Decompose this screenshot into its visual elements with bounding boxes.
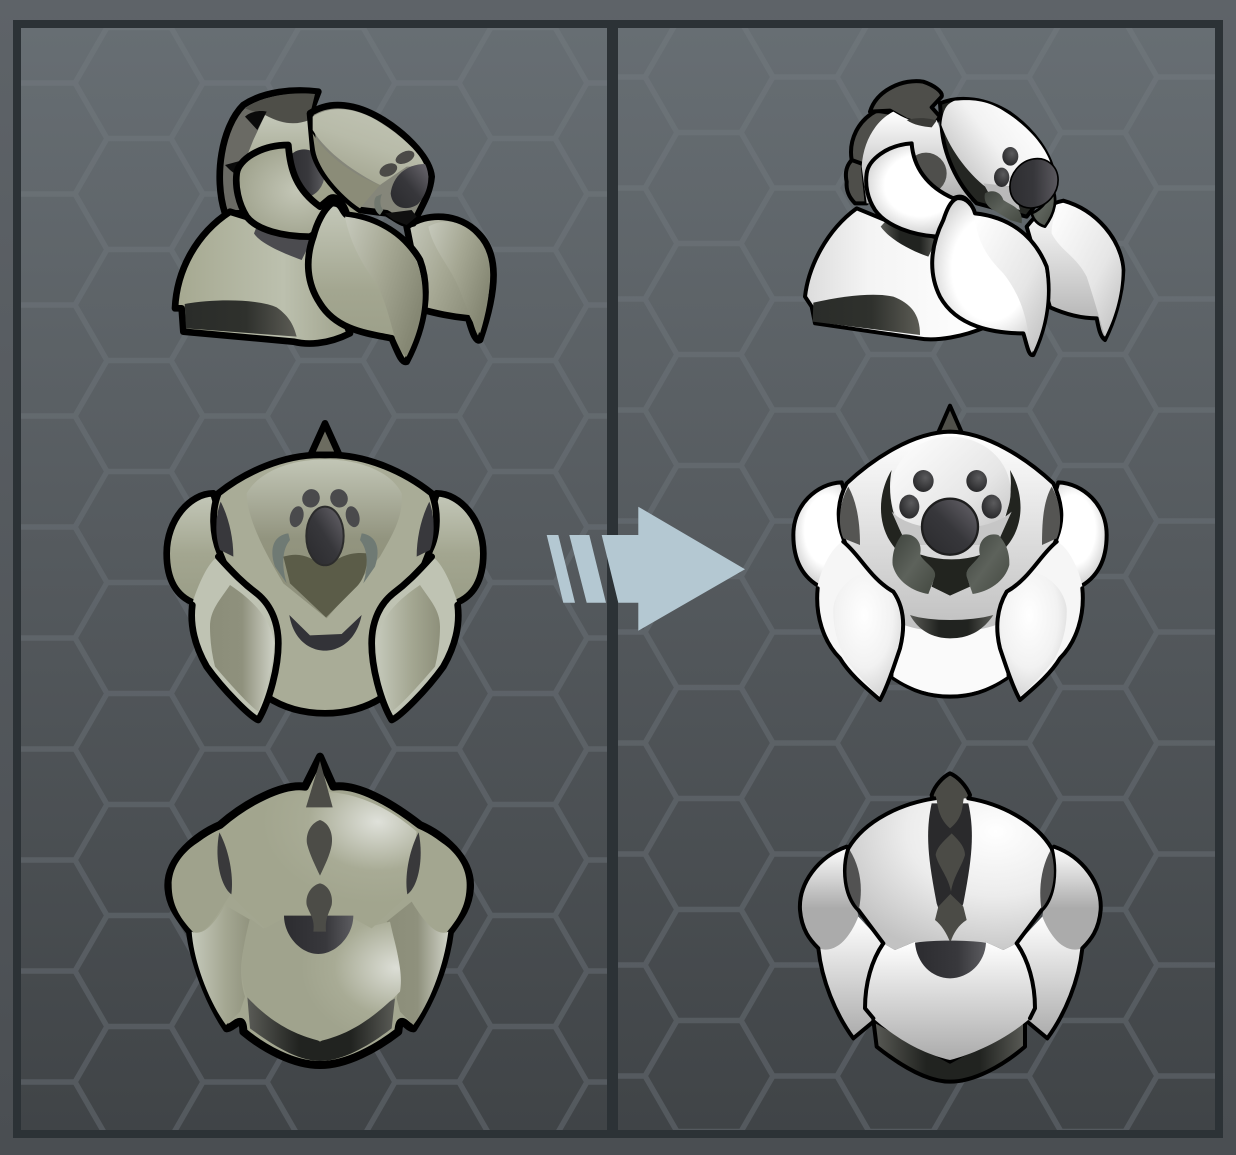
main eye <box>306 507 344 565</box>
mandible <box>374 194 383 215</box>
mandibles <box>985 191 1022 223</box>
side panels <box>216 502 434 557</box>
rear shoulders <box>167 493 483 603</box>
left shoulder <box>172 832 230 933</box>
shoulder socket <box>283 149 325 197</box>
face plate <box>247 459 402 618</box>
head capsule <box>940 99 1068 227</box>
dark head crescents <box>881 470 1021 550</box>
head globe <box>891 437 1011 547</box>
small eyes <box>899 470 1002 519</box>
creature: redesigned front view <box>793 406 1107 700</box>
shoulder pod <box>236 145 347 237</box>
abdomen band <box>873 1020 1025 1082</box>
abdomen outline <box>865 943 1035 1018</box>
right claw <box>997 542 1084 700</box>
abdomen <box>865 942 1035 1060</box>
front claw <box>932 198 1049 355</box>
head capsule <box>310 105 432 225</box>
tail semicircle <box>915 941 986 978</box>
right shoulder <box>1042 847 1101 950</box>
front claw <box>308 203 425 362</box>
main eye <box>1000 149 1068 218</box>
transformation arrow <box>547 507 745 631</box>
small eyes <box>994 147 1018 187</box>
left lower leg <box>192 905 253 1025</box>
rear claw <box>407 217 494 340</box>
left claw <box>816 542 903 700</box>
right claw <box>372 557 458 720</box>
head plate <box>845 798 1054 950</box>
rear head shell <box>846 81 942 203</box>
right lower leg <box>387 902 448 1025</box>
abdomen band <box>247 997 395 1061</box>
shoulder pod <box>866 143 975 237</box>
side slits <box>217 832 421 894</box>
horns <box>272 533 378 583</box>
spike <box>938 406 962 432</box>
body <box>214 455 436 713</box>
tail semicircle <box>284 916 353 954</box>
head globe <box>862 112 980 203</box>
arrow stripes <box>547 535 606 603</box>
body <box>839 432 1061 697</box>
lower crescent <box>910 615 993 638</box>
rear head shell <box>220 90 363 217</box>
head plate <box>223 792 417 928</box>
left shoulder <box>800 847 858 950</box>
mandibles <box>893 534 1009 594</box>
lower face <box>283 553 367 617</box>
silhouette <box>168 757 470 1065</box>
creature: original rear view <box>168 757 470 1065</box>
shoulder socket <box>905 153 947 194</box>
right panel: redesigned creature views <box>618 28 1215 1130</box>
dorsal markings <box>306 761 333 932</box>
right lower leg <box>1017 917 1082 1038</box>
lower crescent <box>289 615 362 651</box>
small eyes <box>377 148 416 179</box>
lower torso <box>893 622 1007 694</box>
lower face <box>892 512 1012 545</box>
rear claw <box>1027 201 1123 340</box>
left panel: original creature views <box>21 28 607 1130</box>
mouth <box>920 554 982 596</box>
body dome <box>805 208 987 339</box>
main body dome <box>175 212 350 344</box>
abdomen <box>242 915 401 1041</box>
rear shoulders <box>793 482 1107 588</box>
right shoulder <box>408 832 467 933</box>
side panels <box>840 487 1060 545</box>
small eyes <box>287 486 362 529</box>
spine stripe <box>928 803 972 942</box>
spike <box>311 423 339 455</box>
arrow body <box>602 507 745 631</box>
main eye <box>391 164 428 208</box>
left claw <box>192 557 278 720</box>
side panels <box>846 850 1054 909</box>
head outline <box>845 798 1054 943</box>
creature: redesigned side view <box>805 81 1123 355</box>
left lower leg <box>818 917 883 1038</box>
creature: original front view <box>167 423 483 720</box>
main eye <box>922 499 978 555</box>
creature: original side view <box>175 90 494 362</box>
spine markings <box>935 776 967 943</box>
creature: redesigned rear view <box>800 773 1101 1082</box>
spine spike <box>932 773 970 807</box>
side outlines <box>800 847 1101 1038</box>
neck shade <box>907 118 937 127</box>
